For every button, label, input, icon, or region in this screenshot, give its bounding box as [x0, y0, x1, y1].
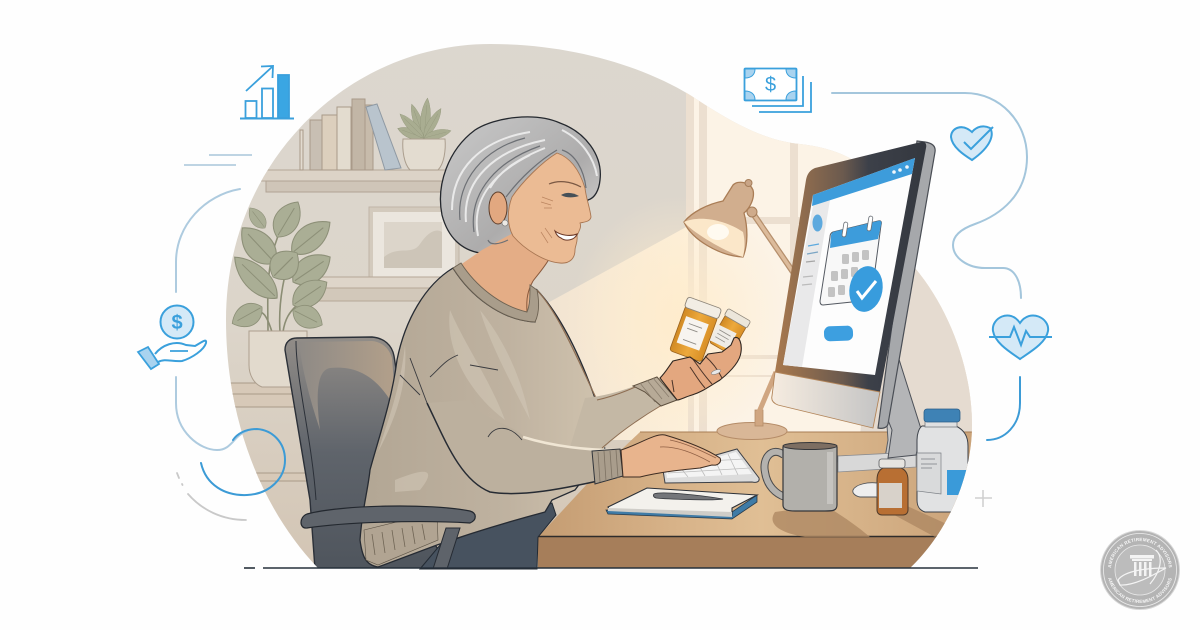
office chair	[285, 337, 450, 569]
raised cuff	[633, 377, 677, 406]
line-art connector right lower	[987, 377, 1020, 440]
hair back	[440, 117, 600, 253]
framed picture	[369, 207, 459, 279]
keyboard hand	[621, 435, 721, 477]
bottle label	[917, 453, 941, 494]
sweater right edge	[537, 290, 597, 400]
seal lettering: AMERICAN RETIREMENT ADVISORS	[1108, 538, 1172, 568]
ground line	[244, 567, 978, 569]
near cuff	[592, 449, 623, 484]
woman	[360, 117, 751, 569]
monitor silver edge	[878, 141, 935, 428]
sweater highlights	[378, 310, 530, 492]
raised sleeve	[570, 377, 662, 450]
chair edge line	[296, 341, 316, 500]
calendar icon	[820, 216, 881, 305]
desk front	[538, 537, 936, 568]
earring	[502, 220, 508, 226]
icon: bar chart with arrow	[240, 66, 294, 118]
check badge	[846, 263, 886, 315]
pill bottle large	[669, 297, 722, 362]
pen	[653, 493, 723, 500]
raised hand	[660, 337, 741, 400]
trousers	[420, 503, 556, 569]
face	[508, 153, 591, 263]
window wall	[694, 98, 861, 432]
desk top	[538, 432, 985, 537]
icon: hand with dollar coin: $	[171, 312, 183, 334]
light cone	[548, 227, 688, 440]
icon: heart with check	[951, 126, 993, 160]
large supplement bottle	[917, 409, 971, 512]
icon: hand with dollar coin	[138, 306, 206, 369]
eye and brow	[549, 182, 581, 187]
icon: stack of dollar bills	[744, 68, 811, 112]
coffee mug	[764, 442, 837, 511]
gray arc and dots	[177, 473, 246, 520]
lower shelf	[319, 276, 440, 302]
window frame	[686, 92, 800, 432]
warm lamp glow	[616, 228, 754, 402]
seal column emblem	[1130, 555, 1154, 576]
blue label	[947, 470, 966, 495]
right wall behind monitor	[860, 269, 972, 432]
logo seal	[1100, 530, 1180, 610]
sidebar avatar	[812, 214, 822, 232]
mug and bottle shadows	[772, 506, 945, 537]
header dots	[892, 165, 909, 174]
sweater hem	[364, 512, 438, 565]
screen header	[812, 158, 915, 206]
monitor chin	[772, 372, 880, 428]
line-art connector left lower	[176, 377, 247, 450]
hair strands	[452, 130, 597, 236]
smile	[555, 231, 577, 240]
icon: stack of dollar bills: $	[765, 74, 776, 96]
monitor	[772, 141, 935, 428]
screen button	[824, 325, 853, 341]
blue loop	[201, 429, 285, 495]
lamp arm	[752, 212, 793, 272]
icon: heart with pulse	[989, 315, 1052, 359]
lamp bulb	[707, 224, 729, 240]
line-art connector right upper	[832, 93, 1027, 298]
small potted plant	[396, 98, 452, 170]
upper shelf	[260, 170, 455, 192]
small amber bottle	[877, 459, 908, 515]
ear	[489, 192, 507, 224]
pill bottle small	[708, 308, 751, 355]
wrinkles	[541, 197, 553, 243]
neck	[453, 232, 549, 318]
line-art connector left upper	[176, 189, 240, 292]
large leafy plant	[232, 202, 331, 388]
chair tan highlight	[299, 341, 396, 430]
lamp base	[717, 422, 787, 440]
desk	[538, 432, 988, 569]
sweater collar	[453, 263, 539, 322]
desk lamp	[684, 180, 793, 440]
computer mouse	[853, 483, 877, 497]
plant pot	[249, 331, 307, 387]
notebook and pen	[606, 488, 757, 519]
scene: room inside the blob	[200, 30, 1000, 570]
lamp stem	[755, 410, 763, 426]
keyboard	[663, 449, 759, 483]
logo seal: AMERICAN RETIREMENT ADVISORS	[1108, 578, 1172, 603]
plus sparkle	[975, 490, 992, 507]
room wall	[200, 30, 1000, 570]
sweater body	[360, 268, 605, 567]
lamp shade	[684, 182, 753, 257]
sidebar lines	[802, 244, 819, 285]
monitor screen	[783, 158, 915, 375]
armrest	[301, 506, 475, 569]
chair back	[285, 337, 450, 569]
near arm	[427, 400, 620, 494]
screen sidebar	[783, 200, 830, 367]
speed lines	[184, 155, 252, 165]
books	[300, 99, 401, 170]
monitor bezel	[775, 142, 926, 392]
monitor stand and base	[838, 353, 922, 472]
cabinet below plant	[230, 382, 306, 482]
